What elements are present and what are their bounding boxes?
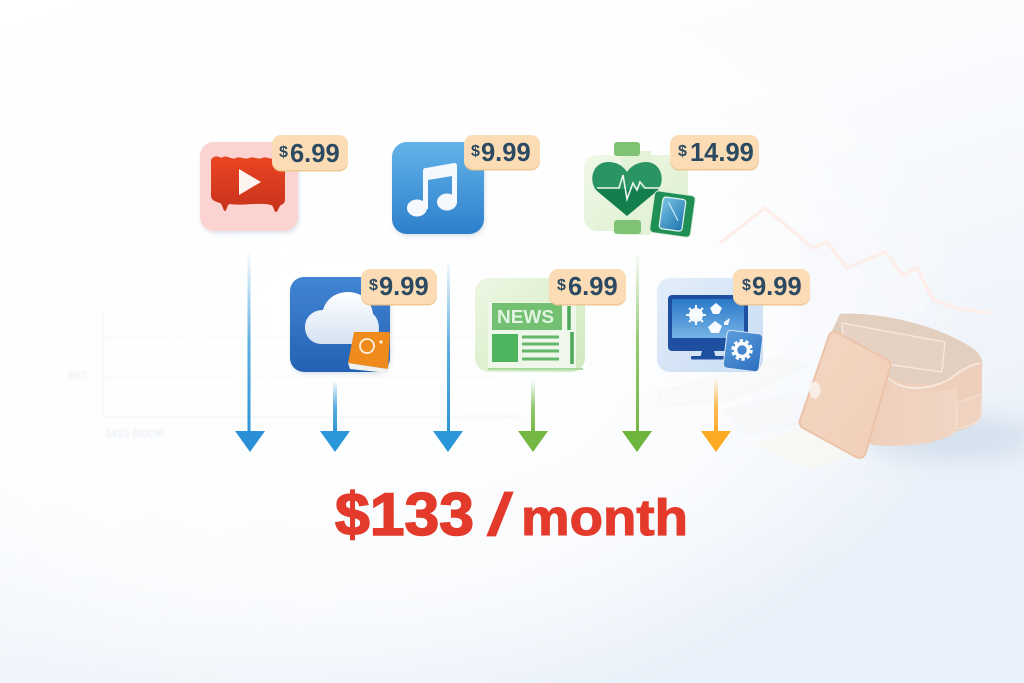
price tag: $6.99 news: 6.99 — [568, 273, 618, 301]
belt ground shadow — [862, 414, 1024, 462]
article lines — [522, 337, 559, 359]
price tag: $9.99 music — [464, 135, 540, 170]
price tag: $9.99 software — [733, 269, 810, 306]
faded bills and papers: background — [657, 358, 856, 470]
arrow: from video subscription — [235, 250, 265, 452]
total: $133 / month: $133 — [335, 481, 474, 548]
belt front band — [868, 383, 957, 446]
arrow: from music subscription — [433, 258, 463, 452]
price tag: $9.99 music: 9.99 — [481, 139, 531, 167]
belt upper lip — [888, 363, 980, 388]
total: $133 / month — [335, 481, 688, 548]
arrow: from software subscription — [701, 378, 731, 452]
icon: video streaming — [200, 142, 298, 231]
total: $133 / month: month — [521, 489, 688, 546]
icon: news subscription: NEWS — [497, 307, 554, 327]
tablet badge — [649, 190, 696, 238]
price tag: $9.99 software: 9.99 — [752, 273, 802, 301]
price tag: $6.99 video: 6.99 — [290, 140, 340, 168]
faded line chart: background left — [103, 311, 520, 440]
belt snap button — [810, 382, 820, 398]
total: $133 / month: / — [488, 483, 513, 548]
price tag: $6.99 video: $ — [279, 144, 288, 161]
arrow: from cloud subscription — [320, 380, 350, 452]
icon: fitness tracker — [584, 142, 696, 238]
faded value label: 597 — [68, 370, 86, 382]
arrow: from news subscription — [518, 380, 548, 452]
icon: news subscription — [475, 278, 585, 372]
price tag: $9.99 cloud — [361, 269, 437, 306]
price tag: $9.99 cloud: $ — [369, 277, 378, 294]
faded chart axis label: 1419 BOOK — [105, 428, 165, 440]
gear badge — [723, 330, 763, 372]
icon: music streaming — [392, 142, 484, 234]
icon: desktop software — [657, 278, 763, 372]
price tag: $6.99 news: $ — [557, 277, 566, 294]
price tag: $6.99 video — [272, 135, 348, 172]
price tag: $9.99 music: $ — [471, 143, 480, 160]
faded declining chart: background right — [720, 208, 990, 313]
orange book badge — [348, 332, 390, 373]
belt front flap — [800, 332, 890, 458]
price tag: $14.99 fitness: 14.99 — [690, 139, 754, 167]
price tag: $6.99 news — [549, 269, 626, 306]
price tag: $9.99 software: $ — [742, 277, 751, 294]
price tag: $14.99 fitness — [670, 135, 759, 170]
belt back band — [840, 314, 982, 446]
price tag: $14.99 fitness: $ — [678, 143, 687, 160]
page number on folded edge — [569, 306, 572, 364]
belt lower strap — [957, 394, 982, 428]
screen bug shapes — [686, 303, 730, 333]
icon: cloud storage — [290, 277, 390, 373]
belt inner surface — [830, 314, 979, 384]
money belt illustration — [800, 314, 1024, 462]
belt pocket — [842, 323, 945, 372]
price tag: $9.99 cloud: 9.99 — [379, 273, 429, 301]
arrow: from fitness subscription — [622, 250, 652, 452]
